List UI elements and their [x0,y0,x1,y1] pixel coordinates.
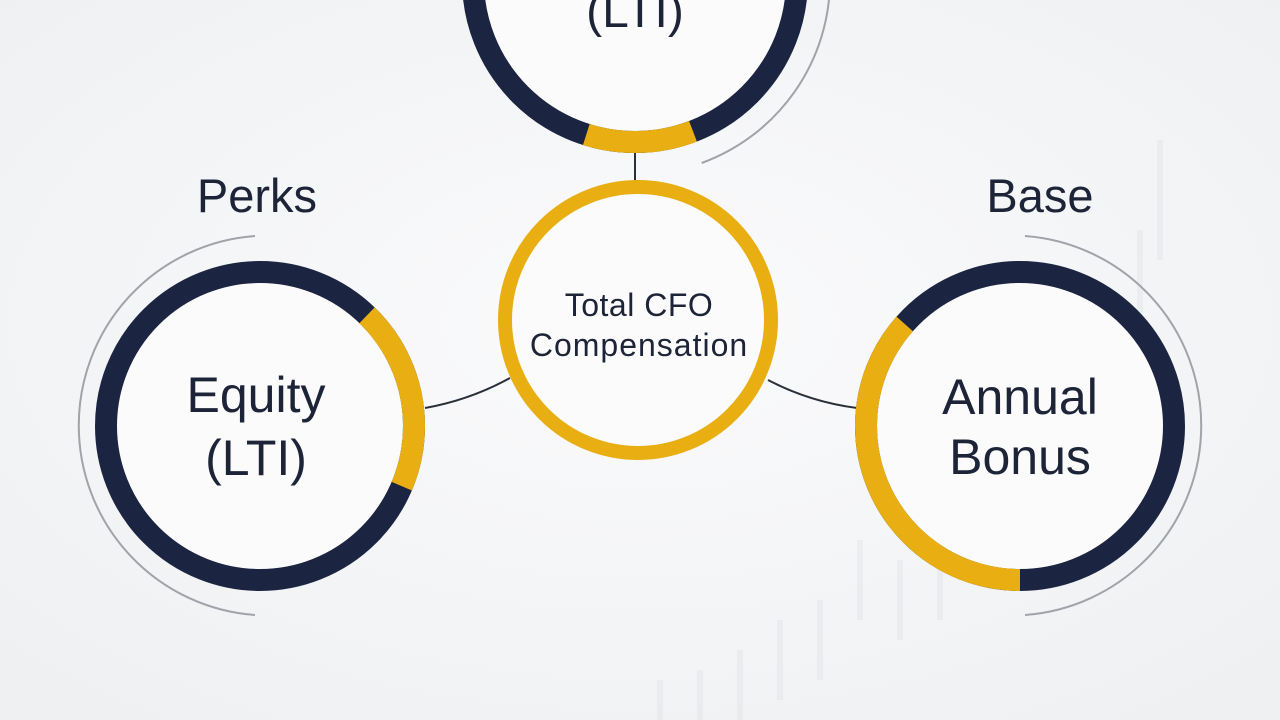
node: left Equity (LTI): (LTI) [205,430,307,486]
node: Annual Bonus: Bonus [949,429,1091,485]
node: left Equity (LTI): Equity [187,367,325,423]
connectors [425,153,857,408]
background chart [660,140,1160,720]
label: Base: Base [986,169,1094,222]
label: Perks: Perks [197,169,317,222]
node: Annual Bonus: Annual [942,369,1098,425]
node: Annual Bonus [866,236,1201,615]
center: Total CFO Compensation: Total CFO [565,287,713,323]
node: top Equity (LTI) [473,0,830,163]
center: Total CFO Compensation [505,187,771,453]
node: left Equity (LTI) [79,236,414,615]
center: Total CFO Compensation: Compensation [530,327,748,363]
